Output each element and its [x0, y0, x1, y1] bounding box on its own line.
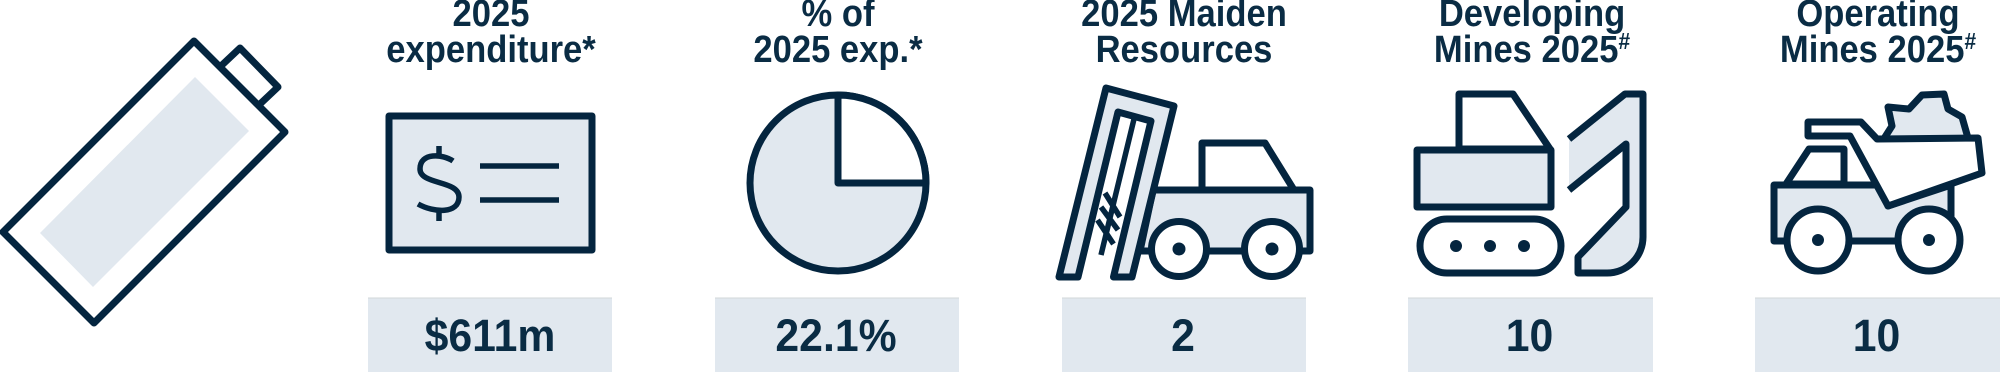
- heading: Operating Mines 2025: Mines 2025: [1780, 27, 1976, 70]
- value box: 2: 2: [1171, 311, 1195, 361]
- icon: dump truck: [1774, 94, 1982, 271]
- heading: % of 2025 exp.: 2025 exp.*: [753, 27, 923, 70]
- value box: $611m: [368, 298, 612, 372]
- value box: 10 operating: 10: [1853, 311, 1900, 361]
- icon: dollar bill: [389, 116, 592, 250]
- column: % of 2025 exp.: [715, 0, 959, 372]
- column: 2025 expenditure: [368, 0, 612, 372]
- column: Developing Mines 2025: [1408, 0, 1653, 372]
- value box: 22.1%: [715, 298, 959, 372]
- value box: 22.1%: 22.1%: [775, 311, 897, 361]
- heading: Developing Mines 2025: #: [1618, 28, 1630, 54]
- column: 2025 Maiden Resources: [1059, 0, 1310, 372]
- heading: 2025 expenditure: expenditure*: [386, 27, 597, 70]
- heading: Developing Mines 2025: Mines 2025: [1434, 27, 1630, 70]
- heading: 2025 Maiden Resources: Resources: [1096, 27, 1272, 70]
- icon: excavator: [1417, 94, 1643, 273]
- heading: Operating Mines 2025: #: [1964, 28, 1976, 54]
- value box: $611m: $611m: [425, 311, 555, 361]
- value box: 10 operating: [1755, 298, 2000, 372]
- value box: 10 developing: [1408, 298, 1653, 372]
- value box: 10 developing: 10: [1506, 311, 1553, 361]
- icon: pie chart: [750, 95, 926, 271]
- value box: 2: [1062, 298, 1306, 372]
- icon: forklift: [1059, 88, 1310, 277]
- column: Operating Mines 2025: [1755, 0, 2000, 372]
- icon: tilted battery: [3, 41, 285, 323]
